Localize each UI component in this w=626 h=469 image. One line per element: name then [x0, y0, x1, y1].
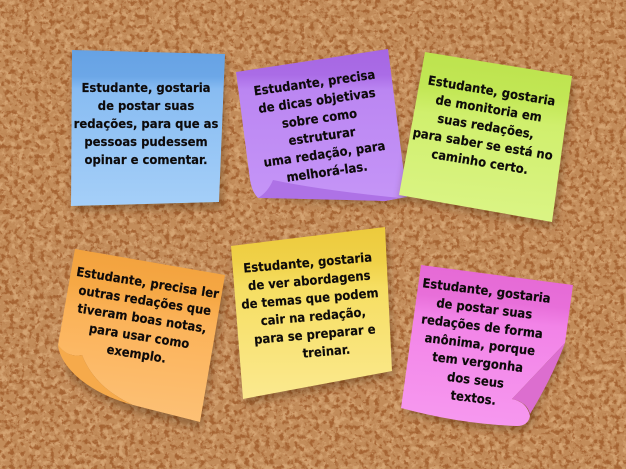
- note text: pink: tem vergonha: [432, 350, 524, 375]
- note text: blue: pessoas pudessem: [84, 135, 208, 149]
- note text: pink: redações de forma: [421, 312, 544, 341]
- note text: purple: sobre como: [281, 106, 358, 131]
- note text: green: suas redações,: [436, 111, 535, 142]
- note text: orange: exemplo.: [106, 342, 167, 366]
- note text: green: caminho certo.: [430, 147, 529, 177]
- note text: pink: anônima, porque: [424, 330, 536, 358]
- note text: yellow: Estudante, gostaria: [243, 250, 373, 276]
- fold: purple: [258, 180, 400, 201]
- note text: purple: Estudante, precisa: [253, 67, 376, 99]
- note text: orange: outras redações que: [77, 283, 212, 318]
- note text: pink: de postar suas: [436, 296, 533, 322]
- note text: green: de monitoria em: [434, 93, 543, 125]
- note text: purple: de dicas objetivas: [257, 85, 376, 116]
- note text: pink: Estudante, gostaria: [422, 276, 551, 306]
- note text: purple: melhorá-las.: [285, 159, 368, 185]
- note: pink: [401, 265, 573, 431]
- note text: orange: Estudante, precisa ler: [75, 264, 220, 301]
- note text: blue: de postar suas: [98, 99, 194, 113]
- note: yellow: [231, 227, 394, 404]
- note text: green: para saber se está no: [412, 125, 554, 163]
- note text: orange: tiveram boas notas,: [76, 301, 208, 336]
- note text: purple: uma redação, para: [263, 138, 386, 170]
- note text: purple: estruturar: [288, 124, 356, 148]
- note text: orange: para usar como: [88, 321, 190, 351]
- note text: yellow: treinar.: [302, 342, 351, 361]
- fold: pink: [512, 343, 565, 414]
- note text: blue: opinar e comentar.: [85, 153, 207, 167]
- note text: yellow: cair na redação,: [260, 305, 366, 328]
- note: orange: [58, 249, 228, 428]
- note text: blue: redações, para que as: [74, 117, 218, 131]
- note text: yellow: de temas que podem: [241, 286, 379, 312]
- fold: orange: [58, 345, 133, 405]
- note: purple: [236, 49, 409, 204]
- note: green: [399, 52, 574, 227]
- note text: green: Estudante, gostaria: [427, 73, 557, 109]
- note text: yellow: para se preparar e: [254, 322, 376, 347]
- note: blue: [71, 50, 227, 211]
- note text: pink: textos.: [450, 388, 497, 408]
- note text: pink: dos seus: [446, 369, 505, 391]
- note text: blue: Estudante, gostaria: [81, 81, 211, 95]
- note text: yellow: de ver abordagens: [247, 268, 371, 293]
